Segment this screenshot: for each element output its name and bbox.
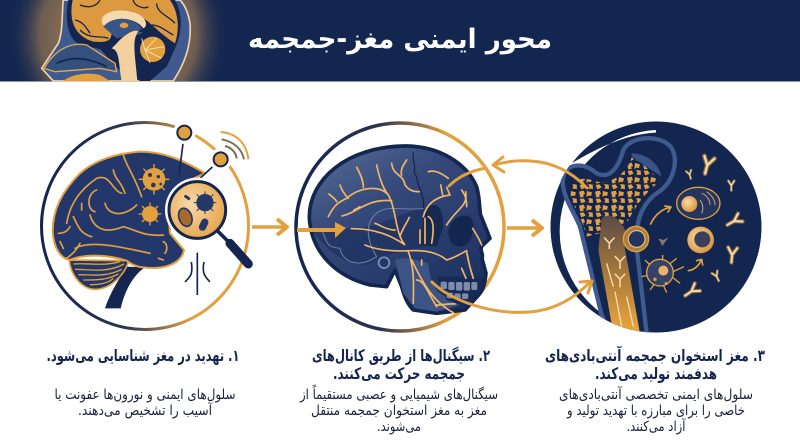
title: محور ایمنی مغز-جمجمه — [248, 24, 552, 55]
virus particles — [139, 164, 169, 225]
icon: skull with nerve channels — [309, 146, 490, 313]
text block: step 2 — [299, 346, 498, 435]
arrow: skull to bone marrow — [507, 220, 542, 236]
text block: step 2: جمجمه حرکت می‌کنند. — [333, 364, 465, 383]
brain — [53, 152, 205, 308]
text block: step 3: هدفمند تولید می‌کند. — [595, 364, 717, 383]
text block: step 1: ۱. تهدید در مغز شناسایی می‌شود. — [46, 346, 240, 365]
text block: step 2: می‌شوند. — [377, 419, 421, 435]
head illustration — [6, 0, 232, 81]
text block: step 3 — [545, 345, 765, 435]
icon: brain with magnifier — [53, 121, 248, 308]
arrow: bone marrow back to skull — [449, 157, 587, 188]
text block: step 2: ۲. سیگنال‌ها از طریق کانال‌های — [312, 346, 490, 365]
arrows to cells — [651, 206, 703, 271]
arrow: brain to skull — [252, 219, 287, 235]
text block: step 1: سلول‌های ایمنی و نورون‌ها عفونت یا — [54, 387, 236, 403]
signal lines below brain — [185, 253, 210, 295]
ring — [42, 122, 248, 330]
text block: step 2: سیگنال‌های شیمیایی و عصبی مستقیماً از — [299, 384, 498, 403]
probes and signal — [173, 121, 248, 178]
panel: signals through skull — [296, 123, 504, 331]
panel: skull bone marrow — [550, 122, 762, 333]
ring — [296, 123, 504, 331]
text block: step 3: خاصی را برای مبارزه با تهدید تولید و — [566, 403, 745, 419]
teeth — [441, 282, 477, 299]
header band — [0, 0, 800, 82]
text block: step 1: آسیب را تشخیص می‌دهند. — [78, 402, 213, 419]
magnifier — [165, 178, 248, 264]
nerves — [328, 160, 482, 313]
arrow: signal into skull — [297, 222, 346, 238]
text block: step 1 — [46, 346, 240, 419]
text block: step 3: آزاد می‌کنند. — [626, 418, 686, 435]
text block: step 3: سلول‌های ایمنی تخصصی آنتی‌بادی‌های — [559, 386, 753, 403]
arrow: skull to bone marrow lower — [432, 281, 592, 312]
antibodies — [683, 156, 743, 299]
immune cells — [623, 187, 720, 293]
antibodies in marrow — [605, 238, 625, 287]
text block: step 2: مغز به مغز استخوان جمجمه منتقل — [311, 403, 487, 419]
panel: threat in brain — [42, 121, 248, 330]
icon: skull bone — [560, 130, 743, 333]
